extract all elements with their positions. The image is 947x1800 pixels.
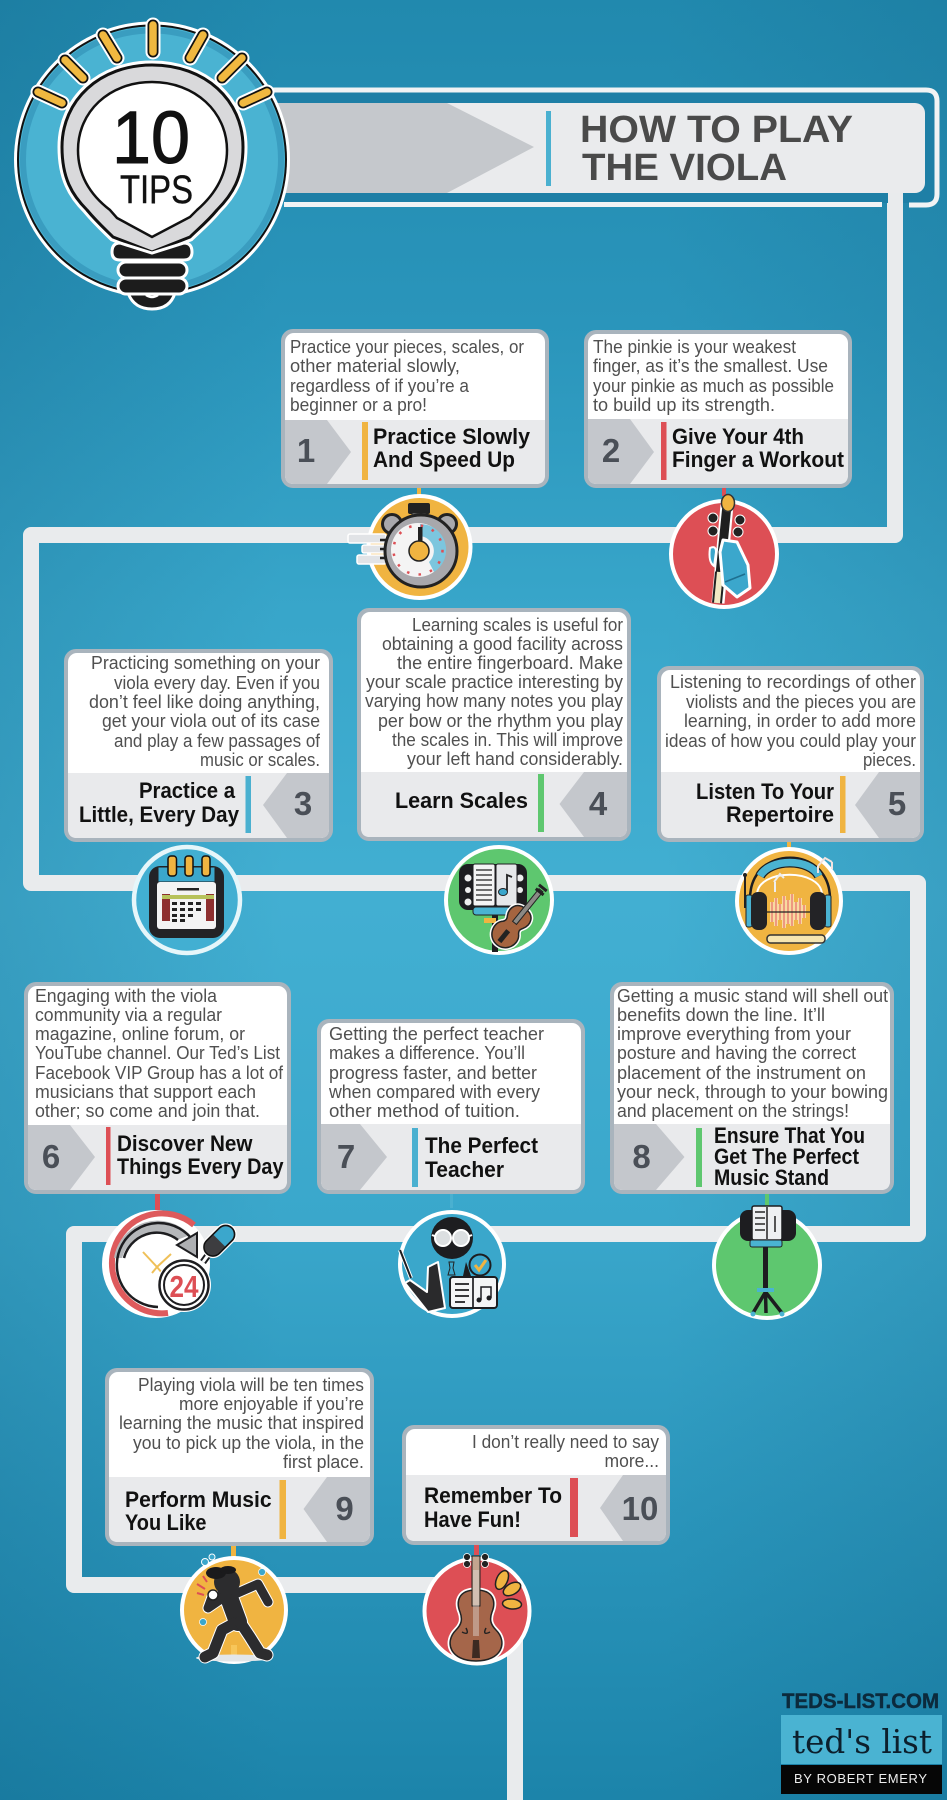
text: tip 8 description: placement of the instrument on: [617, 1063, 866, 1083]
text: tip 3 description: [89, 653, 321, 770]
text: tip 5 description: learning, in order to add more: [684, 711, 916, 731]
text: tip 8 description: Getting a music stand will shell out: [617, 986, 888, 1006]
title: the perfect teacher: [425, 1133, 539, 1182]
text: tip 1 description: regardless of if you’re a: [290, 376, 470, 396]
panel: tip 10: [402, 1425, 670, 1545]
text: tip 8 description: [617, 986, 888, 1121]
badge text: 10 tips: TIPS: [120, 168, 193, 212]
number 6: 6: [42, 1138, 60, 1175]
text: tip 8 description: improve everything from your: [617, 1024, 851, 1044]
text: tip 6 description: Facebook VIP Group has a lot of: [35, 1063, 284, 1083]
text: tip 8 description: your neck, through to your bowing: [617, 1082, 888, 1102]
text: tip 9 description: more enjoyable if you’re: [179, 1394, 364, 1414]
panel: tip 6: [24, 982, 291, 1194]
text: tip 9 description: first place.: [283, 1452, 364, 1472]
text: tip 5 description: ideas of how you could play your: [665, 731, 916, 751]
badge text: 10 tips: 10: [112, 96, 190, 179]
title: listen to your repertoire: [696, 779, 834, 827]
title: music stand: Ensure That You: [714, 1123, 865, 1148]
panel: tip 8: [610, 982, 894, 1194]
text: tip 4 description: obtaining a good facility across: [382, 634, 623, 654]
text: tip 5 description: Listening to recordings of other: [670, 672, 916, 692]
text: tip 4 description: per bow or the rhythm you play: [378, 711, 623, 731]
text: tip 8 description: and placement on the strings!: [617, 1101, 849, 1121]
title: practice a little: Practice a: [139, 778, 236, 803]
text: tip 6 description: musicians that support each: [35, 1082, 256, 1102]
number 10: 10: [622, 1490, 658, 1527]
text: tip 1 description: [290, 337, 524, 415]
icon: music stand: [714, 1194, 820, 1318]
text: tip 6 description: YouTube channel. Our Ted’s List: [35, 1043, 280, 1063]
title: the perfect teacher: Teacher: [425, 1157, 504, 1182]
text: tip 2 description: to build up its strength.: [593, 395, 775, 415]
icon text: 24: 24: [170, 1269, 199, 1304]
icon: lightbulb badge with 10 tips: [14, 22, 290, 309]
icon: viola: [424, 1545, 530, 1664]
text: tip 5 description: pieces.: [863, 750, 916, 770]
title: remember to have fun: [424, 1483, 562, 1532]
title: practice a little: Little, Every Day: [79, 802, 240, 827]
website url: TEDS-LIST.COM: [782, 1690, 939, 1713]
number 3: 3: [294, 785, 312, 822]
text: tip 9 description: learning the music that inspired: [119, 1413, 364, 1433]
text: tip 10 description: I don’t really need to say: [472, 1432, 659, 1452]
text: tip 7 description: [328, 1024, 544, 1121]
icon: calendar: [134, 847, 240, 953]
text: tip 3 description: get your viola out of its case: [102, 711, 320, 731]
panel: tip 3: [64, 649, 333, 842]
text: tip 3 description: and play a few passages of: [114, 731, 321, 751]
text: tip 7 description: when compared with every: [328, 1082, 540, 1102]
brand name: ted's list: [792, 1722, 932, 1761]
number 8: 8: [632, 1138, 651, 1175]
number 7: 7: [337, 1138, 355, 1175]
logo: ted's list: [781, 1690, 942, 1794]
text: tip 4 description: the scales in. This will improve: [392, 730, 623, 750]
icon: teacher conductor: [400, 1194, 504, 1316]
number 5: 5: [888, 785, 906, 822]
text: tip 2 description: finger, as it’s the smallest. Use: [593, 356, 828, 376]
text: tip 3 description: Practicing something on your: [91, 653, 320, 673]
number 9: 9: [335, 1490, 354, 1527]
text: tip 7 description: progress faster, and better: [329, 1063, 537, 1083]
text: tip 10 description: [472, 1432, 659, 1471]
number 1: 1: [297, 432, 315, 469]
text: tip 4 description: your scale practice interesting by: [366, 672, 623, 692]
text: tip 7 description: makes a difference. You’ll: [329, 1043, 525, 1063]
title: listen to your repertoire: Repertoire: [726, 802, 834, 827]
text: tip 6 description: magazine, online forum, or: [35, 1024, 245, 1044]
icon: music stand and violin: [446, 847, 553, 953]
text: tip 8 description: posture and having the correct: [617, 1043, 856, 1063]
byline: BY ROBERT EMERY: [794, 1771, 927, 1786]
text: tip 10 description: more...: [604, 1451, 659, 1471]
title: listen to your repertoire: Listen To Your: [696, 779, 834, 804]
title: practice slowly: Practice Slowly: [373, 424, 531, 449]
icon: clock with 24 and capsule: [102, 1194, 241, 1318]
text: tip 4 description: [365, 615, 623, 769]
text: tip 6 description: community via a regular: [35, 1005, 222, 1025]
title: discover new things: Things Every Day: [117, 1154, 284, 1179]
text: tip 8 description: benefits down the line. It’ll: [617, 1005, 825, 1025]
text: tip 4 description: the entire fingerboard. Make: [397, 653, 623, 673]
text: tip 6 description: Engaging with the viola: [35, 986, 218, 1006]
title: music stand: Music Stand: [714, 1165, 829, 1190]
title: music stand: [714, 1123, 865, 1190]
text: tip 3 description: don’t feel like doing anything,: [89, 692, 320, 712]
text: tip 9 description: Playing viola will be ten times: [138, 1375, 364, 1395]
title: practice a little: [79, 778, 240, 827]
text: tip 9 description: [119, 1375, 364, 1472]
title: practice slowly: And Speed Up: [373, 447, 515, 472]
title: HOW TO PLAY: [580, 109, 853, 151]
text: tip 6 description: [35, 986, 284, 1121]
number 2: 2: [602, 432, 620, 469]
text: tip 4 description: your left hand considerably.: [407, 749, 623, 769]
icon: stopwatch: [348, 488, 472, 600]
text: tip 3 description: viola every day. Even if you: [114, 673, 320, 693]
text: tip 2 description: [593, 337, 834, 415]
title: THE VIOLA: [582, 147, 787, 189]
text: tip 1 description: other material slowly,: [290, 356, 460, 376]
text: tip 6 description: other; so come and join that.: [35, 1101, 260, 1121]
text: tip 9 description: you to pick up the viola, in the: [133, 1433, 364, 1453]
title: perform music: You Like: [125, 1510, 206, 1535]
title: remember to have fun: Remember To: [424, 1483, 562, 1508]
text: tip 2 description: your pinkie as much as possible: [593, 376, 834, 396]
text: tip 7 description: Getting the perfect teacher: [329, 1024, 544, 1044]
text: tip 5 description: [665, 672, 916, 770]
text: tip 4 description: Learning scales is useful for: [412, 615, 623, 635]
title: discover new things: [117, 1131, 284, 1179]
title: learn scales: Learn Scales: [395, 788, 528, 813]
title: discover new things: Discover New: [117, 1131, 253, 1156]
header banner: [270, 90, 938, 208]
title: the perfect teacher: The Perfect: [425, 1133, 539, 1158]
icon: singer: [182, 1546, 286, 1662]
title: perform music: Perform Music: [125, 1487, 272, 1512]
panel: tip 1: [281, 329, 549, 488]
panel: tip 4: [357, 608, 631, 841]
text: tip 3 description: music or scales.: [200, 750, 320, 770]
title: [580, 109, 853, 189]
panel: tip 9: [105, 1368, 374, 1546]
panel: tip 2: [584, 330, 852, 488]
panel: tip 5: [657, 666, 924, 842]
title: 4th finger: Give Your 4th: [672, 424, 804, 449]
title: 4th finger: [672, 424, 845, 472]
panel: tip 7: [317, 1019, 585, 1194]
text: tip 4 description: varying how many notes you play: [365, 691, 623, 711]
title: 4th finger: Finger a Workout: [672, 447, 845, 472]
text: tip 1 description: beginner or a pro!: [290, 395, 427, 415]
number 4: 4: [589, 785, 608, 822]
title: practice slowly: [373, 424, 531, 472]
title: perform music: [125, 1487, 272, 1535]
title: music stand: Get The Perfect: [714, 1144, 860, 1169]
icon: headphones: [737, 842, 841, 953]
text: tip 1 description: Practice your pieces, scales, or: [290, 337, 524, 357]
text: tip 7 description: other method of tuition.: [329, 1101, 520, 1121]
text: tip 5 description: violists and the pieces you are: [686, 692, 916, 712]
title: remember to have fun: Have Fun!: [424, 1507, 521, 1532]
icon: hand on viola neck: [671, 488, 777, 607]
text: tip 2 description: The pinkie is your weakest: [593, 337, 796, 357]
